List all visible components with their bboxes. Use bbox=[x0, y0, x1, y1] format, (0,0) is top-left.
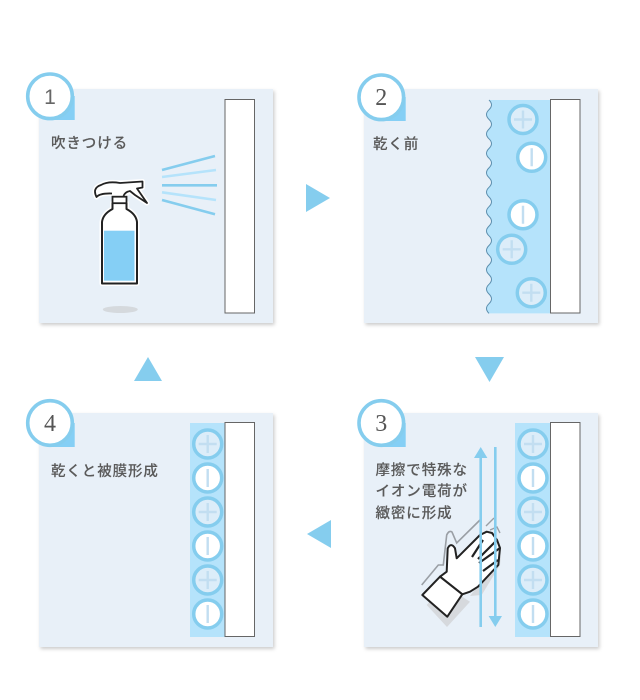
body text: rubbing: 緻密に形成 bbox=[376, 505, 452, 522]
panel 2 background bbox=[364, 89, 598, 323]
arrow: down bbox=[489, 447, 502, 627]
spray lines bbox=[162, 156, 217, 214]
wall 2 bbox=[550, 100, 580, 313]
step badge 4: 4 bbox=[44, 411, 56, 437]
heading: film formed: 乾くと被膜形成 bbox=[51, 462, 159, 480]
panel 1 background bbox=[39, 89, 273, 323]
icon: rubbing hand bbox=[422, 518, 501, 627]
arrow: step 2 to 3 bbox=[475, 357, 504, 382]
body text: rubbing bbox=[376, 461, 468, 522]
arrow: step 3 to 4 bbox=[307, 520, 331, 548]
water layer bbox=[486, 100, 551, 313]
heading: before drying: 乾く前 bbox=[373, 136, 419, 153]
arrow: up bbox=[474, 447, 487, 627]
panel 4 background bbox=[39, 413, 273, 647]
wall 4 bbox=[225, 422, 254, 636]
wall 3 bbox=[550, 422, 580, 636]
aligned ions 4 bbox=[194, 430, 222, 628]
arrow: step 4 to 1 bbox=[134, 357, 162, 381]
icon: spray bottle bbox=[95, 182, 147, 284]
heading: spray: 吹きつける bbox=[51, 135, 128, 152]
panel 3 background bbox=[364, 413, 598, 647]
step badge 2 bbox=[359, 75, 406, 121]
panel: step 4 film formed bbox=[28, 401, 273, 647]
body text: rubbing: 摩擦で特殊な bbox=[376, 461, 468, 479]
step badge 3: 3 bbox=[375, 411, 387, 437]
step badge 2: 2 bbox=[375, 85, 387, 111]
panel: step 3 rubbing bbox=[359, 401, 598, 647]
wall 1 bbox=[225, 100, 254, 313]
bottle shadow bbox=[103, 306, 138, 313]
step badge 1 bbox=[28, 74, 75, 120]
step badge 1: 1 bbox=[44, 86, 56, 109]
step badge 3 bbox=[359, 401, 406, 447]
arrow: step 1 to 2 bbox=[306, 184, 330, 212]
aligned ions 3 bbox=[519, 430, 547, 628]
ion band 3 bbox=[515, 423, 551, 637]
step badge 4 bbox=[28, 401, 75, 447]
ion band 4 bbox=[190, 423, 226, 637]
panel: step 1 spray bbox=[28, 74, 273, 323]
panel: step 2 before drying bbox=[359, 75, 598, 323]
body text: rubbing: イオン電荷が bbox=[376, 482, 468, 500]
scattered ions bbox=[498, 106, 546, 307]
